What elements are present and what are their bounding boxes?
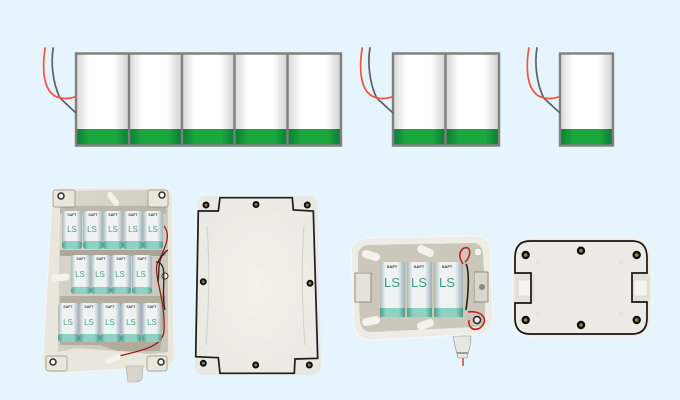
lead wires [527,47,560,113]
cell body [560,54,613,146]
enclosure shell [351,236,493,340]
cell 5: SAFT [148,213,158,217]
cell 3 [111,255,131,294]
cell 3 [434,262,463,317]
cable gland [453,336,471,366]
cell 2: SAFT [88,213,98,217]
cell 1: SAFT [76,257,86,261]
cell 3: SAFT [116,257,126,261]
cell 4: LS [136,270,146,279]
cell 2: SAFT [96,257,106,261]
single-cell battery pack diagram [527,47,613,146]
cell 4 [121,303,141,342]
cell 2 [407,262,432,317]
cell 5 [143,211,163,249]
cell 1: LS [67,225,77,234]
cell 3: LS [108,225,118,234]
cell 2: SAFT [84,305,94,309]
cell 2: LS [95,270,105,279]
cell 2 [91,255,111,294]
cell 5: LS [148,225,158,234]
inner ribs [206,226,305,345]
cell 1: SAFT [67,213,77,217]
cell 4: SAFT [128,213,138,217]
gasket outline [515,241,647,334]
corner screw posts [46,190,168,371]
gasket outline [196,198,318,373]
cell 2 [83,211,103,249]
lead wires [44,47,76,113]
lid screws [201,202,312,368]
cell 2: SAFT [414,264,425,269]
cell bodies [393,54,499,146]
five-cell battery pack diagram [44,47,341,146]
cell 2 [79,303,100,342]
enclosure shell [43,188,174,373]
lead wires [361,47,393,113]
cell 1: SAFT [387,264,398,269]
pack outline [393,54,499,146]
photo: small enclosure lid [512,238,652,337]
cell 1 [62,211,82,249]
lid screws [523,248,640,328]
cell 3 [100,303,121,342]
photo: large enclosure lid [195,196,321,375]
cell 5 [142,303,162,342]
screw posts [366,248,482,326]
side slots [355,272,488,302]
cell 1: SAFT [63,305,73,309]
cell 4: SAFT [126,305,136,309]
cell 3: LS [115,270,125,279]
cable connector and gland [108,357,143,382]
cell 2: LS [411,275,427,290]
cell 3: LS [439,275,455,290]
cell 2: LS [84,318,94,327]
pack outline [76,54,341,146]
wiring [460,248,484,329]
side clips [515,274,650,302]
cell 1 [58,303,79,342]
cell 3: SAFT [105,305,115,309]
cell 3 [103,211,123,249]
lid shell [195,196,321,375]
cell 1: LS [384,275,400,290]
pack outline [560,54,613,146]
battery row 2 [71,255,152,294]
cell 1 [380,262,405,317]
cell 4: LS [128,225,138,234]
battery row 3 [58,303,162,342]
lid shell [512,238,652,337]
cell 3: SAFT [442,264,453,269]
tray floor [58,190,168,354]
cell 4 [132,255,152,294]
cell 5: SAFT [147,305,157,309]
cell 4 [123,211,143,249]
cell 1: LS [75,270,85,279]
cell 2: LS [87,225,97,234]
photo: small open enclosure with 3 cells [351,236,493,366]
battery row 1 [62,211,163,249]
cell 3: SAFT [108,213,118,217]
small pin marks [537,261,622,315]
tray floor [358,243,485,332]
cell 4: SAFT [137,257,147,261]
wiring harness [112,226,168,358]
cell 4: LS [126,318,136,327]
cell 5: LS [147,318,157,327]
cell 1: LS [63,318,73,327]
two-cell battery pack diagram [361,47,499,146]
cell bodies [76,54,341,146]
cell 1 [71,255,91,294]
cell 3: LS [105,318,115,327]
photo: large open enclosure with 14 cells [43,188,174,382]
